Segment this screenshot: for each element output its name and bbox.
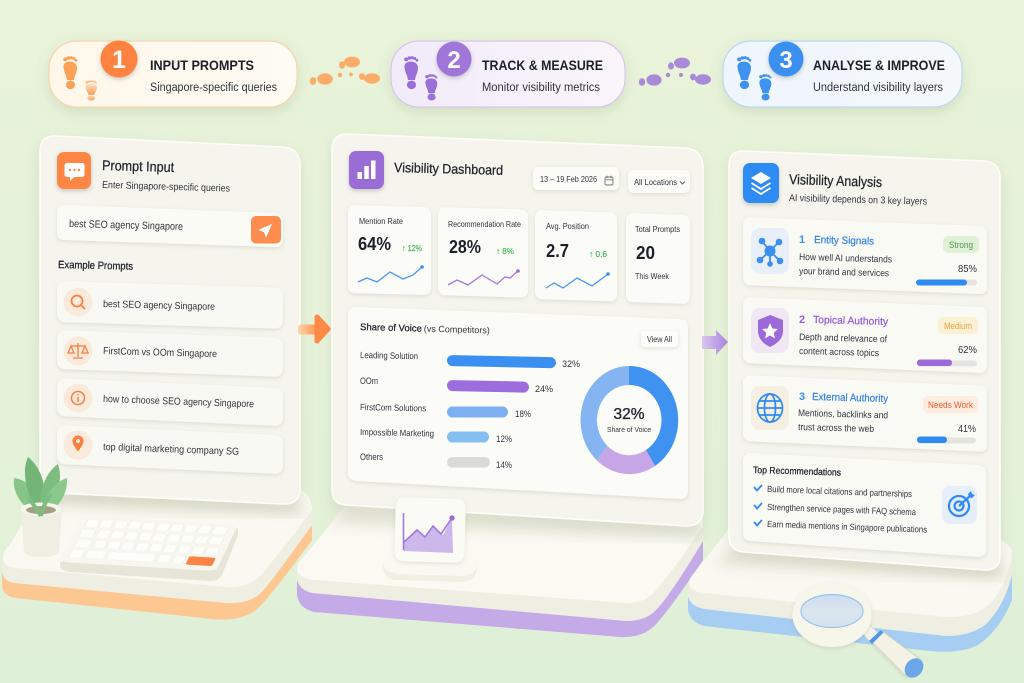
input box: best SEO agency Singapore: [69, 218, 183, 233]
metric card: mention rate: ↑ 12%: [402, 243, 422, 253]
send button: [251, 216, 281, 244]
metric card: total prompts: This Week: [635, 271, 670, 281]
arrow: input to dashboard: [298, 317, 328, 341]
example prompt row 3: how to choose SEO agency Singapore: [103, 394, 255, 410]
example prompt row 1: [57, 281, 283, 329]
metric card: mention rate: 64%: [358, 233, 391, 254]
plant in pot: [14, 457, 67, 557]
bar chart: competitors: 18%: [515, 409, 531, 420]
icon: shield star: [751, 308, 789, 353]
bar chart: competitors: OOm: [360, 376, 378, 386]
sparkline: [358, 265, 424, 282]
bar chart: competitors: 24%: [535, 384, 554, 395]
layer card: topical authority: content across topics: [799, 346, 879, 359]
location selector: All Locations: [634, 177, 677, 187]
chart block on pedestal: [383, 497, 477, 582]
panel title: Prompt Input: [102, 157, 174, 175]
icon: blue footprints: [737, 56, 772, 100]
step 2 pill: track and measure: [391, 41, 625, 107]
layer card: external authority: 41%: [958, 424, 976, 435]
donut chart: Share of Voice: [607, 425, 651, 434]
progress bar: [916, 280, 977, 286]
metric card: total prompts: Total Prompts: [635, 224, 680, 234]
panel title: Visibility Analysis: [789, 171, 882, 190]
icon: stacked layers: [743, 163, 779, 203]
icon: target: [942, 486, 977, 524]
layer card: entity signals: How well AI understands: [799, 252, 892, 265]
icon: bar chart: [349, 151, 384, 189]
checklist: Build more local citations and partnerships: [767, 484, 913, 499]
bar chart: competitors: Others: [360, 452, 383, 462]
layer card: external authority: 3: [799, 391, 805, 403]
step subtitle: Singapore-specific queries: [150, 82, 277, 94]
platform base 2: [297, 500, 703, 637]
step title: INPUT PROMPTS: [150, 57, 254, 73]
step title: TRACK & MEASURE: [482, 57, 603, 73]
platform base 1: [2, 480, 312, 620]
chart card: [394, 497, 466, 563]
bar chart: competitors: 12%: [496, 434, 512, 445]
keyboard: [60, 516, 238, 581]
panel: top recommendations: [743, 453, 986, 557]
example prompt row 4: top digital marketing company SG: [103, 442, 239, 458]
layer card: entity signals: Entity Signals: [814, 234, 874, 248]
checklist: Strengthen service pages with FAQ schema: [767, 502, 916, 517]
pedestal: [383, 549, 477, 582]
status badge: strong: Strong: [949, 240, 973, 250]
icon: chat bubble: [57, 152, 91, 189]
metric card: total prompts: 20: [636, 242, 655, 263]
layer card: external authority: Mentions, backlinks and: [798, 408, 888, 421]
footsteps: purple connector: [639, 58, 711, 86]
step number 3: 3: [779, 47, 793, 74]
status badge: strong: [943, 236, 979, 253]
metric card: mention rate: [348, 205, 431, 295]
icon: globe: [751, 386, 789, 430]
leaves: [14, 457, 67, 516]
step number 3: [768, 42, 804, 76]
progress bar: [917, 436, 976, 444]
sparkline: [546, 272, 610, 288]
icon: orange footprints: [63, 56, 97, 101]
metric card: average position: ↑ 0.6: [589, 249, 607, 259]
step 1 pill: input prompts: [49, 40, 297, 107]
bar chart: competitors: [360, 350, 581, 471]
bar chart: competitors: FirstCom Solutions: [360, 402, 427, 413]
progress bar: [917, 360, 977, 366]
checklist: Earn media mentions in Singapore publications: [767, 519, 928, 535]
panel: prompt input: [40, 136, 300, 504]
bar chart: competitors: 14%: [496, 460, 512, 471]
handle: [859, 622, 927, 682]
panel title: Visibility Dashboard: [394, 160, 503, 178]
layer card: external authority: External Authority: [812, 391, 889, 405]
bar chart: competitors: 32%: [562, 359, 581, 370]
metric card: recommendation rate: 28%: [449, 236, 481, 257]
example prompt row 3: [57, 378, 283, 426]
example prompts heading: Example Prompts: [58, 259, 133, 273]
panel subtitle: Enter Singapore-specific queries: [102, 180, 230, 195]
status badge: needs work: [923, 396, 978, 413]
metric card: recommendation rate: [438, 207, 528, 298]
icon: purple footprints: [404, 56, 438, 100]
location selector: [628, 170, 690, 193]
chart title: Share of Voice(vs Competitors): [360, 322, 490, 336]
view all button: [641, 331, 678, 347]
step number 2: 2: [447, 47, 461, 74]
layer card: topical authority: Depth and relevance of: [799, 332, 888, 345]
layer card: external authority: trust across the web: [798, 422, 874, 435]
footsteps: orange connector: [310, 57, 380, 85]
icon: entity network: [751, 228, 789, 274]
status badge: medium: Medium: [944, 321, 972, 331]
layer card: entity signals: [743, 217, 987, 294]
pot: [21, 509, 62, 557]
bar chart: competitors: Impossible Marketing: [360, 427, 434, 439]
arrow: dashboard to analysis: [702, 330, 728, 355]
panel: share of voice: [348, 307, 688, 499]
step subtitle: Understand visibility layers: [813, 82, 943, 94]
metric card: mention rate: Mention Rate: [359, 216, 403, 226]
magnifying glass: [792, 583, 927, 682]
step number 1: [100, 40, 138, 78]
metric card: average position: Avg. Position: [546, 221, 589, 231]
layer card: entity signals: your brand and services: [799, 266, 889, 279]
layer card: external authority: [743, 375, 987, 452]
panel: visibility analysis: [729, 151, 1000, 570]
metric card: average position: [535, 210, 617, 301]
layer card: entity signals: 1: [799, 234, 805, 246]
bar chart: competitors: Leading Solution: [360, 350, 418, 361]
view all button: View All: [647, 335, 672, 344]
metric card: average position: 2.7: [546, 240, 569, 261]
layer card: entity signals: 85%: [958, 264, 977, 275]
layer card: topical authority: Topical Authority: [813, 314, 889, 328]
donut chart: [581, 366, 678, 474]
metric card: total prompts: [626, 213, 690, 304]
status badge: medium: [938, 317, 978, 334]
step 3 pill: analyse and improve: [723, 41, 962, 107]
example prompt row 1: best SEO agency Singapore: [103, 299, 216, 313]
layer card: topical authority: 62%: [958, 345, 977, 356]
status badge: needs work: Needs Work: [928, 400, 973, 410]
layer card: topical authority: 2: [799, 314, 805, 326]
input box: [57, 205, 283, 247]
checklist: [754, 484, 928, 535]
example prompt row 4: [57, 425, 283, 474]
step number 1: 1: [112, 46, 126, 74]
example prompt row 2: [57, 330, 283, 377]
panel subtitle: AI visibility depends on 3 key layers: [789, 193, 927, 208]
metric card: recommendation rate: ↑ 8%: [496, 246, 514, 256]
date range selector: [533, 167, 619, 190]
sparkline: [448, 269, 520, 285]
step subtitle: Monitor visibility metrics: [482, 82, 600, 94]
panel: visibility dashboard: [332, 134, 703, 526]
donut chart: 32%: [613, 406, 645, 423]
metric card: recommendation rate: Recommendation Rate: [448, 220, 521, 229]
step title: ANALYSE & IMPROVE: [813, 57, 945, 73]
orange key: [185, 556, 216, 566]
step number 2: [436, 42, 472, 76]
date range selector: 13 – 19 Feb 2026: [540, 174, 597, 184]
example prompt row 2: FirstCom vs OOm Singapore: [103, 346, 218, 360]
recommendations heading: Top Recommendations: [753, 465, 841, 479]
platform base 3: [688, 530, 1012, 652]
layer card: topical authority: [743, 297, 987, 373]
